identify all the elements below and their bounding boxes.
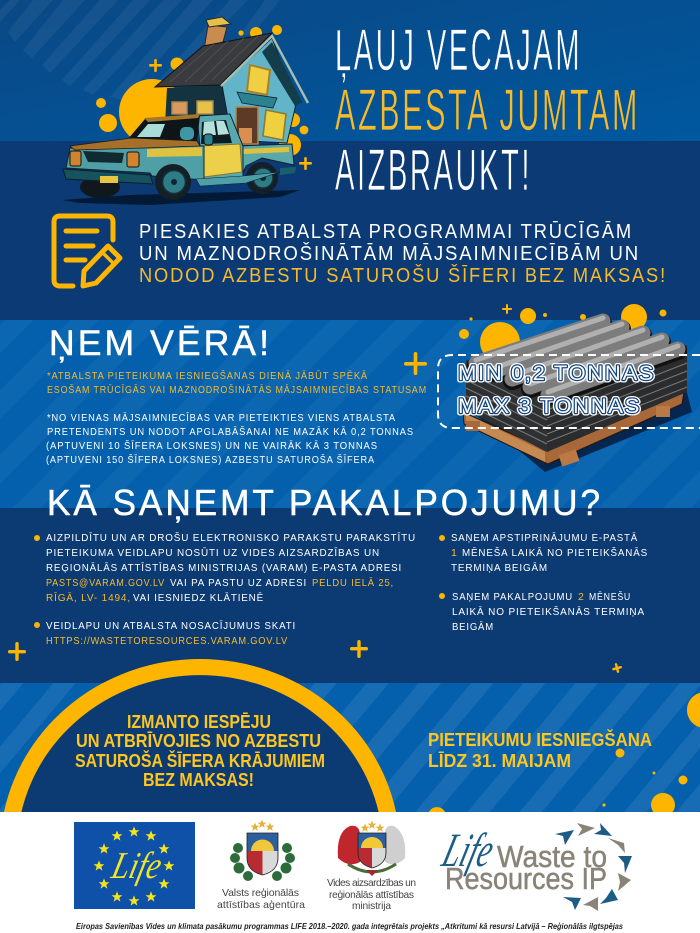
yellow blobs behind house — [96, 25, 312, 170]
note: quantity limits: *NO VIENAS MĀJSAIMNIECĪBAS VAR PIETEIKTIES VIENS ATBALSTA — [47, 412, 396, 424]
truck front body — [66, 146, 204, 180]
list: left column: VAI PA PASTU UZ ADRESI — [170, 577, 307, 589]
yellow dots — [404, 304, 666, 375]
list: left column: RĪGĀ, LV- 1494, — [46, 592, 131, 604]
logo: ministry of environment: ministrija — [352, 901, 391, 912]
call to action text: PIESAKIES ATBALSTA PROGRAMMAI TRŪCĪGĀM — [139, 220, 633, 243]
heading: take note: ŅEM VĒRĀ! — [49, 324, 272, 363]
callout: min and max tonnage: MIN 0,2 TONNAS — [458, 362, 655, 385]
list: right column: SAŅEM APSTIPRINĀJUMU E-PASTĀ — [451, 532, 638, 544]
logo: Valsts reģionālās attīstības aģentūra: Valsts reģionālās — [222, 886, 299, 899]
list: left column: PELDU IELĀ 25, — [312, 577, 394, 589]
rear wheel — [246, 162, 278, 194]
application deadline — [428, 729, 652, 771]
list: left column: VAI IESNIEDZ KLĀTIENĒ — [133, 592, 264, 604]
lower dark wall — [165, 85, 232, 140]
list: left column: VEIDLAPU UN ATBALSTA NOSACĪJUMUS SKATI — [46, 620, 296, 632]
application deadline: PIETEIKUMU IESNIEGŠANA — [428, 729, 652, 750]
note: quantity limits: (APTUVENI 10 ŠĪFERA LOKSNES) UN NE VAIRĀK KĀ 3 TONNAS — [46, 439, 378, 452]
circle: offer message: IZMANTO IESPĒJU — [127, 712, 271, 732]
callout: min and max tonnage: MIN 0,2 TONNAS — [458, 362, 655, 385]
title — [335, 18, 640, 203]
yellow dots bottom right — [429, 693, 700, 812]
shadow — [470, 385, 692, 472]
logo: Life Waste to Resources IP — [436, 823, 632, 911]
logo: Life Waste to Resources IP: Waste to — [497, 839, 607, 874]
note: quantity limits: (APTUVENI 150 ŠĪFERA LOKSNES) AZBESTU SATUROŠA ŠĪFERA — [46, 453, 375, 466]
diagonal stripes top left — [0, 0, 280, 100]
note: quantity limits: PRETENDENTS UN NODOT APGLABĀŠANAI NE MAZĀK KĀ 0,2 TONNAS — [47, 425, 414, 438]
windshield — [128, 115, 200, 142]
callout: min and max tonnage — [438, 355, 700, 428]
list: right column: BEIGĀM — [452, 621, 494, 633]
illustration: house on pickup truck — [62, 17, 312, 205]
circle: offer message — [4, 659, 396, 812]
callout: min and max tonnage: MAX 3 TONNAS — [458, 395, 641, 418]
list: right column: LAIKĀ NO PIETEIKŠANĀS TERMIŅA — [452, 605, 645, 618]
footer caption: Eiropas Savienības Vides un klimata pasākumu programmas LIFE 2018.–2020. gada integrētais projekts „Atkritumi kā resursi Latvijā – Reģionālās ilgtspējas — [76, 921, 623, 931]
ridges — [476, 318, 678, 397]
list: right column: 1 — [451, 547, 458, 559]
far front tyre — [80, 176, 120, 198]
stack sides — [466, 360, 547, 452]
pallet — [463, 392, 684, 464]
circle: offer message: UN ATBRĪVOJIES NO AZBESTU — [76, 731, 321, 751]
windows and door — [247, 65, 270, 95]
roof — [155, 33, 272, 87]
list: left column: HTTPS://WASTETORESOURCES.VARAM.GOV.LV — [46, 635, 288, 647]
logo: Life Waste to Resources IP: Resources IP — [445, 861, 607, 896]
icon: document with pencil — [54, 216, 120, 286]
callout: min and max tonnage: MAX 3 TONNAS — [458, 395, 641, 418]
logo: Valsts reģionālās attīstības aģentūra — [217, 820, 305, 911]
list: right column: SAŅEM PAKALPOJUMU — [452, 591, 573, 603]
logo: EU LIFE flag: Life — [107, 846, 166, 887]
logo: EU LIFE flag — [74, 822, 195, 909]
call to action text: NODOD AZBESTU SATUROŠU ŠĪFERI BEZ MAKSAS! — [139, 264, 667, 287]
decorative plus signs — [8, 640, 623, 674]
note: status requirement: *ATBALSTA PIETEIKUMA IESNIEGŠANAS DIENĀ JĀBŪT SPĒKĀ — [47, 369, 368, 382]
call to action text: UN MAZNODROŠINĀTĀM MĀJSAIMNIECĪBĀM UN — [139, 242, 640, 265]
logo: Life Waste to Resources IP: Life — [436, 823, 500, 877]
list: right column: MĒNEŠA LAIKĀ NO PIETEIKŠANĀS — [462, 546, 648, 559]
list: right column: TERMIŅA BEIGĀM — [451, 562, 548, 574]
list: left column: PASTS@VARAM.GOV.LV — [46, 577, 165, 589]
circle: offer message: SATUROŠA ŠĪFERA KRĀJUMIEM — [75, 750, 325, 771]
circle: offer message: BEZ MAKSAS! — [143, 770, 254, 790]
application deadline: LĪDZ 31. MAIJAM — [428, 751, 571, 771]
illustration: slate pallet — [404, 304, 692, 472]
list: left column: AIZPILDĪTU UN AR DROŠU ELEKTRONISKO PARAKSTU PARAKSTĪTU — [46, 531, 416, 544]
logo: ministry of environment — [327, 820, 416, 912]
logo: Valsts reģionālās attīstības aģentūra: attīstības aģentūra — [217, 898, 305, 911]
list: right column — [439, 532, 648, 633]
note: status requirement — [47, 369, 427, 396]
hood — [70, 138, 200, 150]
logo: ministry of environment: Vides aizsardzības un — [327, 878, 416, 889]
list: left column — [34, 531, 416, 647]
gable wall — [222, 38, 296, 143]
note: quantity limits — [46, 412, 414, 466]
list: left column: REĢIONĀLĀS ATTĪSTĪBAS MINISTRIJAS (VARAM) E-PASTA ADRESI — [46, 562, 402, 574]
chimney — [204, 25, 227, 50]
cab — [197, 114, 243, 182]
note: status requirement: ESOŠAM TRŪCĪGĀS VAI MAZNODROŠINĀTĀS MĀJSAIMNIECĪBAS STATUSAM — [47, 383, 427, 396]
truck shadow — [62, 190, 300, 205]
list: left column: PIETEIKUMA VEIDLAPU NOSŪTI UZ VIDES AIZSARDZĪBAS UN — [46, 547, 380, 559]
heading: how to get the service: KĀ SAŅEMT PAKALPOJUMU? — [47, 482, 603, 523]
front bumper — [63, 169, 153, 184]
truck bed — [238, 144, 294, 180]
front wheel — [155, 164, 191, 200]
list: right column: 2 — [578, 591, 585, 603]
call to action text — [139, 220, 667, 287]
list: right column: MĒNEŠU — [589, 590, 631, 603]
logo: ministry of environment: reģionālās attīstības — [329, 888, 414, 901]
